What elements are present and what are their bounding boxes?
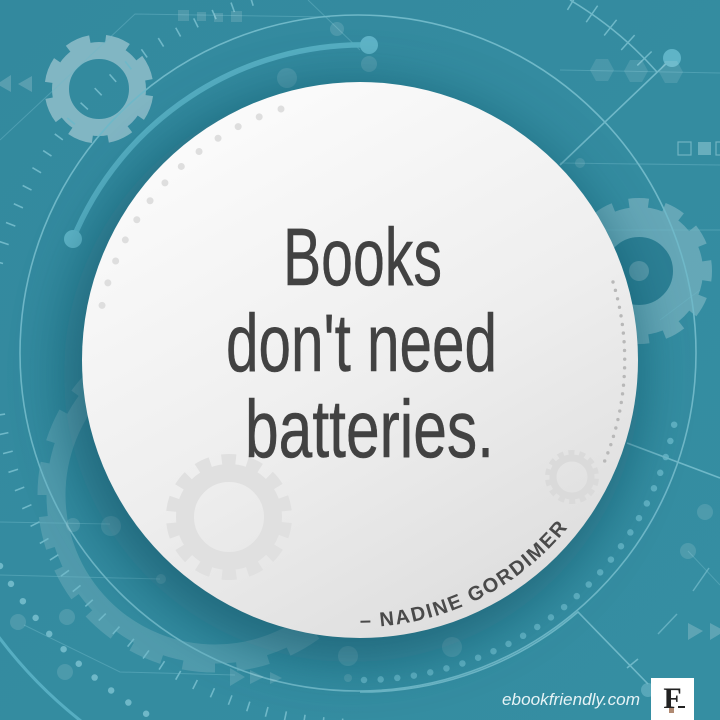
triangles bottom	[230, 668, 282, 686]
lower right circuit line	[360, 443, 720, 697]
gear: inside disc small	[545, 450, 599, 504]
squares right	[678, 142, 720, 155]
disc shadow	[64, 86, 640, 662]
quote: batteries.	[245, 384, 494, 475]
thick arc with end dots	[64, 36, 378, 248]
thick arc lower left	[0, 636, 90, 720]
triangles left	[0, 75, 32, 92]
dotted ring lower right	[364, 415, 676, 680]
quote: Books	[283, 212, 442, 303]
tick ring: lower left	[0, 414, 360, 720]
author credit: – NADINE GORDIMER	[360, 522, 568, 626]
dotted arc top left inside disc	[100, 109, 281, 316]
hexagons	[590, 59, 683, 83]
quote	[226, 212, 497, 475]
quote: don't need	[226, 298, 497, 389]
gear: top left	[44, 34, 154, 144]
tick arc upper right with dot	[560, 0, 681, 165]
dotted arc right inside disc	[603, 282, 625, 465]
logo: F	[663, 682, 682, 715]
dotted ring lower left	[0, 566, 157, 720]
gear: large bottom left	[43, 323, 387, 667]
gear: inside disc large	[167, 455, 291, 579]
tick ring: upper left	[0, 0, 255, 263]
short slashes right	[658, 568, 709, 634]
logo	[651, 678, 694, 720]
triangles right	[688, 623, 720, 640]
squares top	[178, 10, 242, 22]
gear: right	[563, 195, 715, 347]
main disc	[82, 82, 638, 638]
website: ebookfriendly.com	[502, 690, 640, 709]
